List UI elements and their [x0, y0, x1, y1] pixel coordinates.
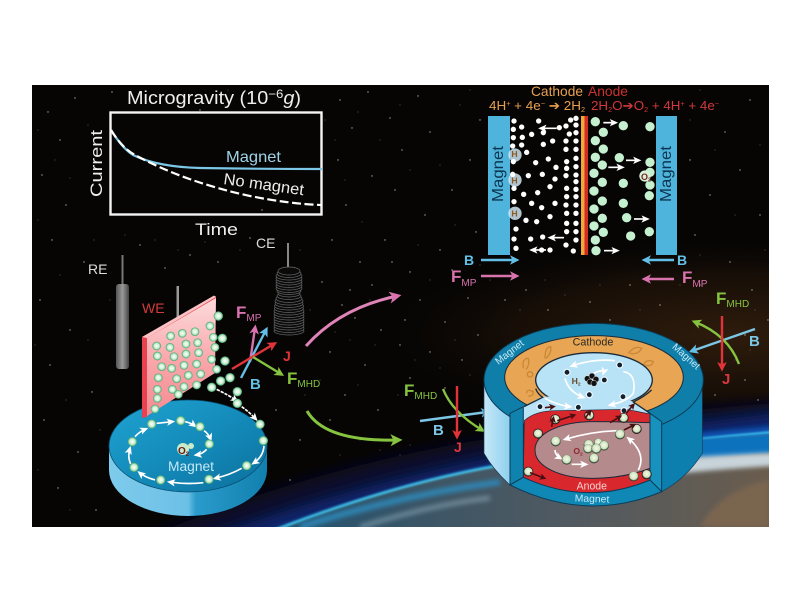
force vectors right of cylinder: J: [722, 371, 730, 388]
label: O2: 2: [580, 451, 583, 457]
bottom magnet rim: [510, 477, 662, 506]
label: B right: B: [677, 252, 687, 268]
cathode bubble traces: [523, 347, 653, 396]
anode reaction: + 4H: [648, 98, 680, 113]
swirl arrows: [129, 389, 264, 483]
label: B: B: [250, 376, 261, 393]
chart title: g: [283, 88, 294, 108]
force vectors right of cylinder: B: [749, 333, 760, 350]
force vectors left of cylinder: MHD: [414, 391, 437, 402]
label: FMHD: MHD: [297, 379, 320, 390]
counter electrode coil: CE: [256, 235, 275, 251]
label: FMP right: MP: [692, 279, 708, 290]
magnet disc: [109, 389, 267, 516]
cathode ring: [505, 336, 683, 419]
heading: cathode: Cathode: [531, 83, 583, 99]
label: J: J: [283, 348, 291, 364]
counter electrode coil: [256, 235, 304, 335]
heading: anode: Anode: [588, 83, 628, 99]
hydrogen bubbles: H: [511, 176, 518, 186]
arrow: FMP left: [481, 275, 516, 277]
anode reaction: −: [715, 101, 719, 108]
oxygen bubbles on electrode and disc: [128, 311, 268, 485]
label: FMP left: MP: [461, 278, 477, 289]
cathode reaction: 4H: [489, 98, 506, 113]
arrow: J: [232, 344, 274, 369]
hydrogen bubbles: [537, 362, 627, 414]
small white motion arrows: [532, 123, 647, 251]
cathode reaction: 2: [581, 107, 585, 114]
chart frame: [110, 112, 322, 214]
left magnet: Magnet: [490, 145, 507, 202]
cathode reaction: + 4e: [510, 98, 541, 113]
label: FMP right: F: [682, 268, 692, 287]
anode reaction: + 4e: [685, 98, 715, 113]
label: O2: O: [573, 446, 580, 456]
O2 bubble: 2: [186, 452, 190, 458]
swirl in oxygen chamber: [555, 431, 641, 470]
cathode reaction: ➔ 2H: [545, 98, 581, 113]
working electrode plate: WE: [142, 300, 165, 316]
label: FMP: MP: [246, 313, 262, 324]
chart: current vs time in microgravity: [87, 87, 322, 239]
O2 bubble cluster: [551, 429, 639, 481]
electrode stack: [581, 116, 588, 255]
white hydrogen dots: [510, 116, 579, 254]
arrow: FMP: [250, 328, 255, 362]
arrow: FMP right: [645, 278, 674, 280]
anode reaction: O➔O: [612, 98, 644, 113]
force vectors left of cylinder: F: [404, 381, 414, 400]
green oxygen dots: 2: [648, 178, 651, 184]
arrow: B: [241, 330, 266, 378]
label: H2: H: [572, 376, 578, 386]
label: cathode: Cathode: [573, 337, 613, 349]
green oxygen dots: [589, 117, 655, 255]
infographic canvas: [32, 85, 769, 527]
hydrogen bubbles: H: [511, 208, 518, 218]
right magnet: [656, 116, 677, 255]
label: magnet left: Magnet: [493, 338, 527, 367]
oxygen chamber: [535, 422, 650, 478]
arrow: B left: [481, 259, 516, 261]
anode floor: [523, 409, 650, 493]
label: magnet right: Magnet: [670, 342, 702, 372]
label: FMP left: F: [451, 267, 461, 286]
swirl in hydrogen chamber: [545, 360, 634, 407]
chart title: −6: [268, 87, 284, 101]
reference electrode: [88, 255, 129, 369]
hydrogen chamber: [536, 353, 652, 407]
hydrogen bubbles: [508, 148, 522, 220]
H2 bubble cluster: [584, 373, 599, 386]
hydrogen bubbles: H: [511, 149, 518, 159]
arrow: green link to cylinder: [307, 411, 398, 440]
chart title: ): [294, 88, 300, 108]
green oxygen dots: O: [641, 172, 648, 182]
force vectors right of cylinder: MHD: [726, 299, 749, 310]
force vectors right of cylinder: [692, 289, 760, 388]
cut faces: [510, 407, 523, 485]
cathode notch edges: [524, 389, 652, 413]
anode reaction: 2: [608, 107, 612, 114]
O2 bubble: [177, 443, 194, 458]
O2 bubble: O: [178, 446, 186, 457]
force vectors at working electrode: [232, 303, 320, 393]
label: FMP: F: [236, 303, 246, 322]
label: magnet curve: Magnet: [226, 149, 282, 166]
label: B left: B: [464, 252, 474, 268]
anode reaction: 2H: [591, 98, 608, 113]
force vectors right of cylinder: F: [716, 289, 726, 308]
arrow: B right: [645, 259, 674, 261]
outer walls: [484, 383, 510, 485]
force vectors left of cylinder: B: [433, 422, 444, 439]
curve: no magnet: [111, 130, 322, 205]
label: H2: 2: [578, 381, 581, 387]
working electrode plate: [142, 286, 216, 418]
curve: magnet: [111, 130, 322, 169]
cylindrical electrolyzer cutaway: [484, 323, 703, 506]
arrow: FMHD: [253, 357, 281, 374]
y-axis label: Current: [87, 130, 106, 197]
top magnet ring: [484, 323, 703, 437]
x-axis label: Time: [195, 220, 238, 239]
label: magnet bottom: Magnet: [574, 493, 610, 506]
anode reaction: 2: [644, 107, 648, 114]
chart title: Microgravity (10: [127, 88, 255, 108]
chamber gap strip: [523, 397, 650, 423]
label: magnet: Magnet: [168, 459, 214, 474]
cathode reaction: +: [506, 101, 510, 108]
force vectors left of cylinder: [404, 381, 487, 455]
anode reaction: +: [680, 101, 685, 108]
stars: [40, 92, 768, 510]
background panel: space and Earth: [32, 85, 800, 545]
arrow: pink link to top diagram: [306, 296, 397, 346]
bubbles and dark arrows on anode: [524, 411, 651, 479]
label: no magnet curve: No magnet: [222, 171, 306, 199]
label: anode: Anode: [577, 481, 607, 493]
force vectors left of cylinder: J: [454, 439, 462, 455]
label: FMHD: F: [287, 369, 297, 388]
left magnet: [488, 116, 510, 255]
top diagram: cathode and anode between magnets: [451, 83, 719, 290]
reference electrode: RE: [88, 261, 107, 277]
right magnet: Magnet: [658, 145, 675, 202]
cathode reaction: −: [541, 101, 545, 108]
